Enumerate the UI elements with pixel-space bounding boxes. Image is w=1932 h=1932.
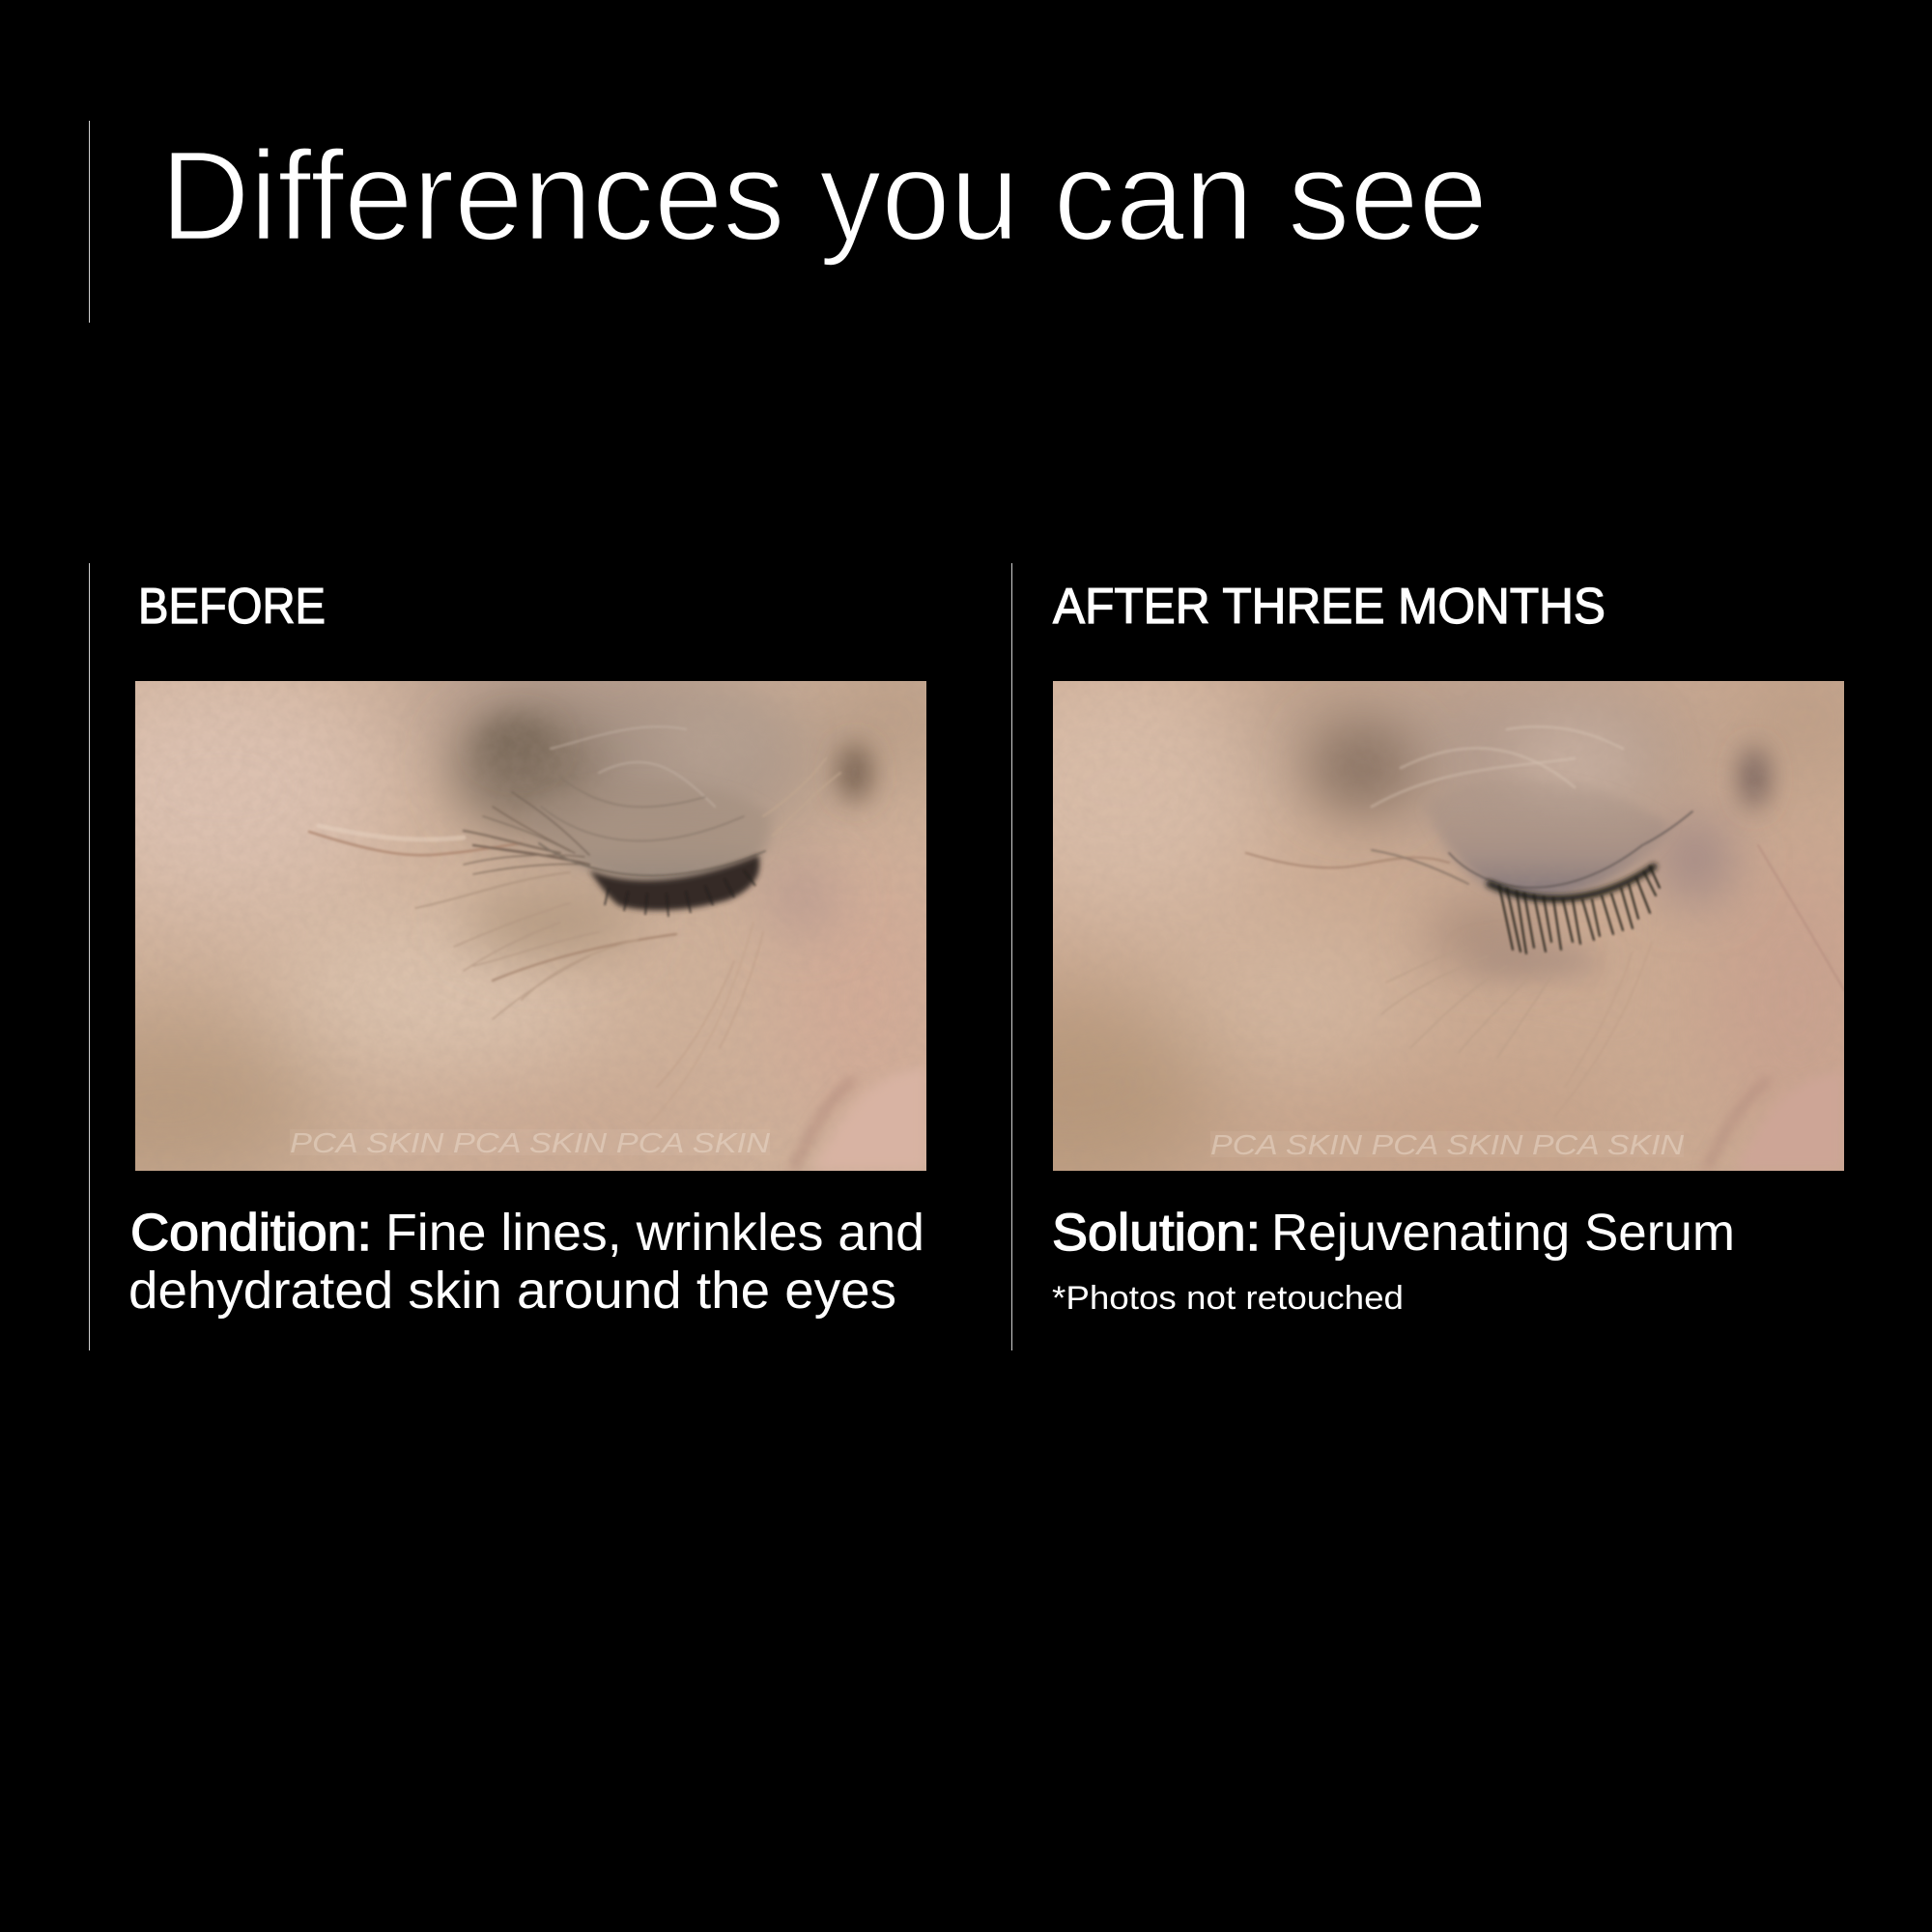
panel: before: [89, 563, 926, 1350]
watermark: [1211, 1134, 1684, 1155]
caption: solution: [1052, 1204, 1735, 1317]
caption: solution: Solution:: [1052, 1204, 1261, 1262]
caption: condition: [128, 1204, 924, 1320]
caption: condition: Condition:: [130, 1204, 372, 1262]
heading: after three months: AFTER THREE MONTHS: [1053, 579, 1605, 635]
nasal fold: [792, 1067, 926, 1171]
crow's feet wrinkles: [307, 726, 841, 1020]
caption: condition: dehydrated skin around the eyes: [128, 1262, 896, 1320]
photo: after: [1053, 681, 1844, 1171]
panel: after three months: [1011, 563, 1844, 1350]
eyelid: [1425, 780, 1671, 897]
photo: before: [135, 681, 926, 1171]
watermark: PCA SKIN PCA SKIN PCA SKIN: [1210, 1130, 1684, 1161]
heading: before: BEFORE: [138, 579, 326, 635]
nasal fold: [1704, 1081, 1824, 1168]
watermark: PCA SKIN PCA SKIN PCA SKIN: [290, 1128, 770, 1159]
lashes: [589, 855, 759, 917]
title: Differences you can see: [160, 125, 1488, 267]
watermark: [291, 1132, 770, 1153]
lashes: [1490, 867, 1660, 953]
footnote: *Photos not retouched: [1052, 1280, 1404, 1317]
skin texture: [1053, 681, 1844, 1171]
skin texture: [135, 681, 926, 1171]
caption: condition: Fine lines, wrinkles and: [385, 1204, 924, 1262]
caption: solution: Rejuvenating Serum: [1271, 1204, 1735, 1262]
fine lines: [1244, 725, 1844, 989]
eyelid: [549, 806, 771, 881]
